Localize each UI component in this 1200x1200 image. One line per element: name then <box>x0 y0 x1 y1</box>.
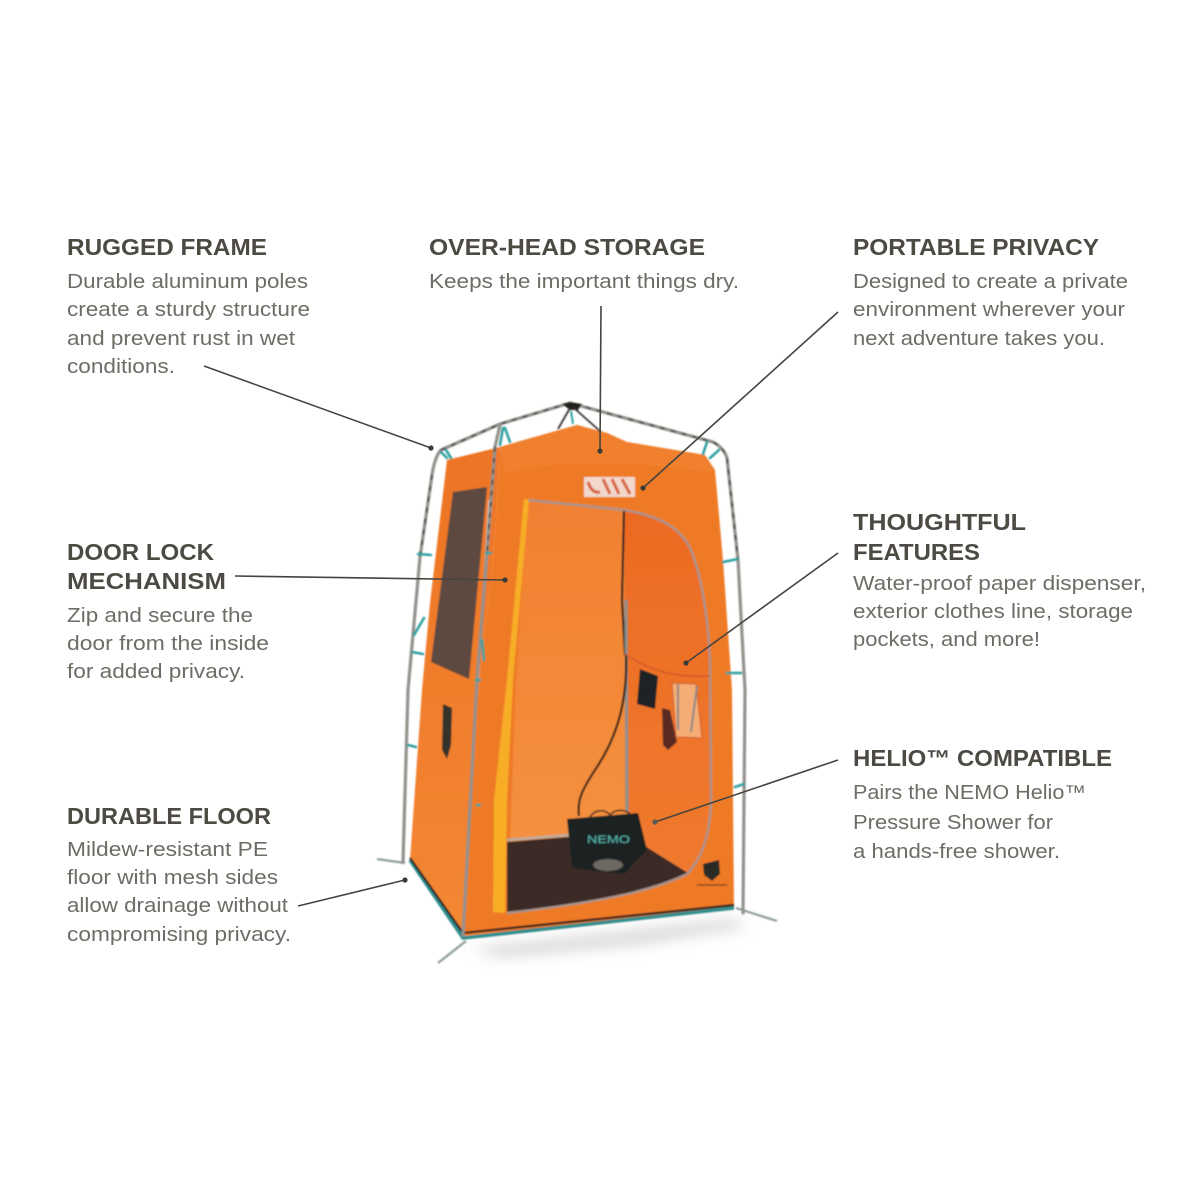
text: helio compatible description: a hands-free shower. <box>853 841 1060 863</box>
text: rugged frame description: and prevent rust in wet <box>67 328 295 350</box>
text: thoughtful features description <box>853 573 1146 651</box>
heading: helio compatible: HELIO™ COMPATIBLE <box>853 745 1112 771</box>
door clothes line <box>625 654 710 676</box>
window seam <box>478 500 489 680</box>
teal pole clips <box>408 428 744 805</box>
leader line: rugged frame <box>204 366 434 451</box>
text: portable privacy description: Designed to create a private <box>853 271 1128 293</box>
heading: thoughtful features: FEATURES <box>853 539 980 565</box>
tent base trim <box>410 860 734 938</box>
tent base dark edge <box>410 858 734 933</box>
heading: door lock mechanism <box>67 539 226 594</box>
text: rugged frame description: conditions. <box>67 356 175 378</box>
panel: rugged frame <box>67 234 310 378</box>
text: rugged frame description: Durable aluminum poles <box>67 271 308 293</box>
panel: over-head storage <box>429 234 739 293</box>
text: durable floor description: allow drainage without <box>67 895 288 917</box>
text: over-head storage description: Keeps the important things dry. <box>429 271 739 293</box>
heading: over-head storage: OVER-HEAD STORAGE <box>429 234 705 260</box>
text: door lock description: door from the inside <box>67 633 269 655</box>
heading: portable privacy: PORTABLE PRIVACY <box>853 234 1099 260</box>
text: thoughtful features description: exterior clothes line, storage <box>853 601 1133 623</box>
text: portable privacy description: next adventure takes you. <box>853 328 1105 350</box>
reflective logo patch <box>584 477 635 497</box>
mesh window <box>431 487 487 679</box>
frame poles <box>403 403 745 935</box>
text: rugged frame description: create a sturdy structure <box>67 299 310 321</box>
text: helio compatible description: Pairs the NEMO Helio™ <box>853 782 1086 804</box>
helio shower bag <box>567 810 647 874</box>
text: door lock description: Zip and secure the <box>67 605 253 627</box>
text: thoughtful features description: Water-proof paper dispenser, <box>853 573 1146 595</box>
door opening piping <box>507 500 711 913</box>
roof hub and struts <box>558 402 601 432</box>
panel: durable floor <box>67 803 291 946</box>
text: portable privacy description <box>853 271 1128 350</box>
centre door zipper and inner pole <box>622 511 625 655</box>
leader line: door lock mechanism <box>235 576 508 583</box>
leader line: thoughtful features <box>683 553 838 666</box>
text: door lock description <box>67 605 269 683</box>
brand emblem on wall <box>703 860 720 881</box>
heading: rugged frame: RUGGED FRAME <box>67 234 267 260</box>
text: durable floor description: compromising privacy. <box>67 924 291 946</box>
heading: door lock mechanism: DOOR LOCK <box>67 539 214 565</box>
storage pocket <box>672 683 702 738</box>
text: portable privacy description: environment wherever your <box>853 299 1125 321</box>
tent floor <box>507 837 688 913</box>
inner door pole <box>626 600 627 812</box>
panel: helio compatible <box>853 745 1112 863</box>
panel: thoughtful features <box>853 509 1146 651</box>
heading: thoughtful features: THOUGHTFUL <box>853 509 1026 535</box>
illustration: orange privacy tent <box>377 402 777 963</box>
yellow door edge strip <box>493 499 529 913</box>
door flap <box>510 500 627 842</box>
tent stakes and guy lines <box>377 859 777 963</box>
heading: durable floor: DURABLE FLOOR <box>67 803 271 829</box>
hanging strap <box>662 708 677 750</box>
floor back edge <box>507 835 570 840</box>
tent roof fabric highlight <box>500 425 713 472</box>
text: helio compatible description: Pressure Shower for <box>853 812 1053 834</box>
panel: portable privacy <box>853 234 1128 350</box>
text: durable floor description <box>67 839 291 946</box>
paper dispenser <box>637 669 658 709</box>
heading: thoughtful features <box>853 509 1026 565</box>
leader line: over-head storage <box>597 306 603 454</box>
shower hose <box>579 655 626 816</box>
ground shadow <box>470 918 745 958</box>
text: rugged frame description <box>67 271 310 378</box>
pocket trim <box>678 684 697 732</box>
text: durable floor description: Mildew-resistant PE <box>67 839 268 861</box>
tent front panel <box>463 425 734 936</box>
brand emblem on side panel <box>442 704 452 759</box>
tent left side panel <box>410 447 500 935</box>
text: helio compatible description <box>853 782 1086 863</box>
text: door lock description: for added privacy. <box>67 661 245 683</box>
brand wordmark on wall <box>697 884 727 886</box>
text: thoughtful features description: pockets, and more! <box>853 629 1040 651</box>
panel: door lock mechanism <box>67 539 269 683</box>
interior right wall <box>624 511 711 874</box>
text: durable floor description: floor with mesh sides <box>67 867 278 889</box>
helio shower bag: NEMO <box>587 834 631 846</box>
leader line: portable privacy <box>640 312 838 491</box>
heading: door lock mechanism: MECHANISM <box>67 568 226 594</box>
leader line: durable floor <box>298 877 408 906</box>
leader line: helio compatible <box>652 760 838 825</box>
